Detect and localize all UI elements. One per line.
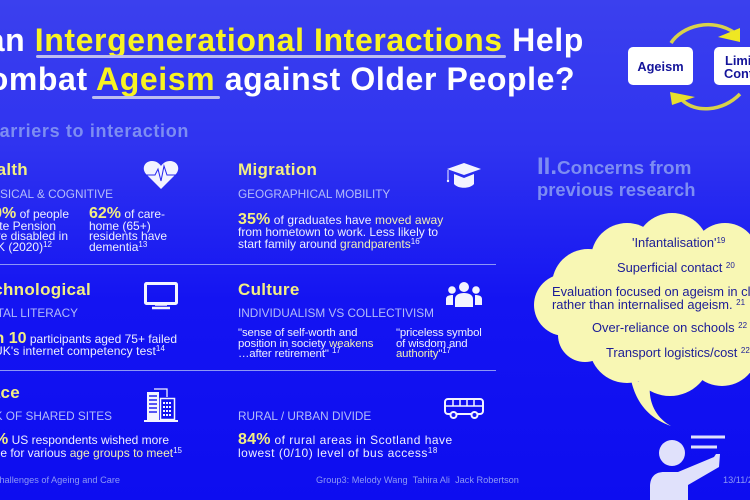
divider [0,370,496,371]
heading: concerns from previous research [537,153,695,200]
culture subtitle: INDIVIDUALISM VS COLLECTIVISM [238,306,434,320]
icon: people group [446,282,482,307]
panel: space [0,383,182,460]
quote: collectivism: "priceless symbol [396,327,482,339]
migration statistic: 35% of graduates have moved away [238,211,443,228]
quote: individualism [238,327,374,360]
panel: rural urban divide [238,409,453,460]
quote: individualism: …after retirement" 17 [238,346,341,360]
panel: culture [238,280,482,360]
panel: health [0,160,167,254]
health statistic two: dementia13 [89,240,147,254]
panel: migration [238,160,444,251]
icon: graduation cap [446,163,481,188]
divider [0,264,496,265]
health statistic one [0,205,69,254]
title underline: Intergenerational Interactions [36,55,506,58]
heading: concerns from previous research: II.Concerns from [537,153,691,180]
quote: collectivism: authority"17 [396,346,451,360]
quote: individualism: position in society weakens [238,338,373,350]
health statistic two [89,205,167,254]
health statistic two: residents have [89,229,167,243]
health statistic two: 62% of care- [89,205,165,222]
title [0,22,584,97]
speech cloud [534,213,750,426]
rural statistic: lowest (0/10) level of bus access18 [238,446,438,460]
heading: concerns from previous research: previous research [537,179,695,200]
migration subtitle: GEOGRAPHICAL MOBILITY [238,187,390,201]
space statistic [0,431,182,460]
migration statistic [238,211,444,251]
panel: technological [0,280,177,358]
icon: heart with pulse [144,161,178,189]
title underline: Ageism [92,96,220,99]
concern: evaluation focus [552,285,750,312]
concern: superficial contact: Superficial contact 20 [617,260,735,275]
icon: buildings [144,388,178,422]
migration statistic: start family around grandparents16 [238,237,420,251]
culture heading: Culture [238,280,300,299]
icon: presenter [650,436,725,500]
icon: monitor [144,282,178,310]
quote: collectivism [396,327,482,360]
rural statistic: 84% of rural areas in Scotland have [238,431,453,448]
migration statistic: from hometown to work. Less likely to [238,225,438,239]
rural subtitle: RURAL / URBAN DIVIDE [238,409,371,423]
concern: evaluation focus: rather than internalised ageism. 21 [552,297,745,312]
concern: over-reliance on schools: Over-reliance on schools 22 [592,320,747,335]
health statistic two: home (65+) [89,219,151,233]
icon: bus [444,398,484,419]
footer: group members: Group3: Melody Wang Tahira Ali Jack Robertson [316,475,519,485]
concern: transport logistics: Transport logistics/cost 22 [606,345,750,360]
rural statistic [238,431,453,460]
concern: infantalisation: 'Infantalisation'19 [632,235,725,250]
diagram: ageism cycle [628,22,750,110]
quote: collectivism: of wisdom and [396,338,468,350]
quote: individualism: "sense of self-worth and [238,327,357,339]
diagram: ageism cycle: Ageism [637,59,684,74]
migration heading: Migration [238,160,317,179]
technological statistic [0,330,177,358]
